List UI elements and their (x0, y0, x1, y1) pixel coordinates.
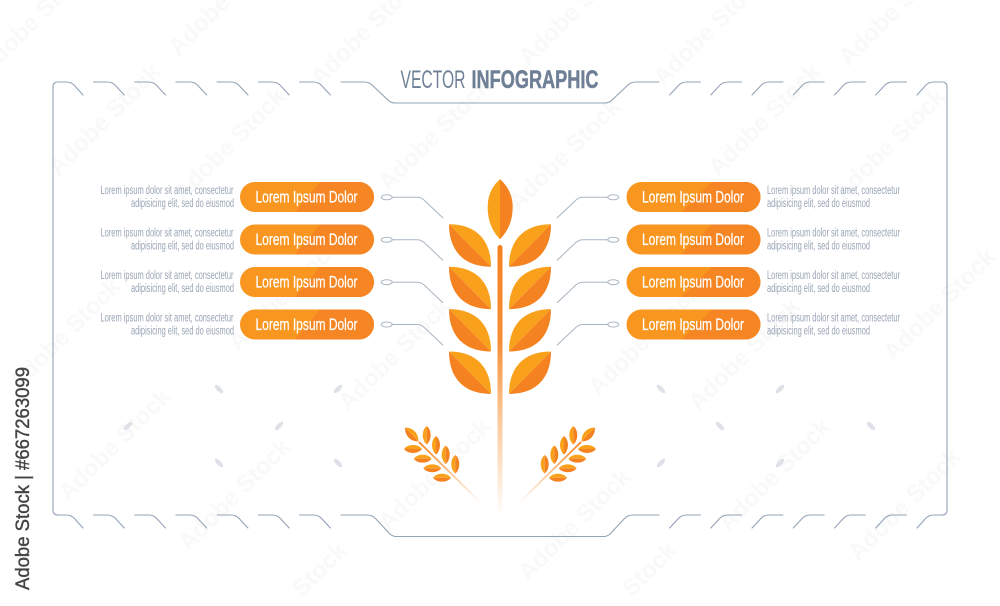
background watermark pattern: Adobe Stock (503, 93, 627, 216)
title: VECTOR (400, 66, 466, 94)
description text right: adipisicing elit, sed do eiusmod (767, 326, 870, 338)
description text right: Lorem ipsum dolor sit amet, consectetur (767, 185, 900, 197)
connectors left (381, 195, 443, 345)
label pills left: Lorem Ipsum Dolor (256, 315, 358, 334)
background watermark pattern: Adobe Stock (53, 383, 177, 506)
label pills left: Lorem Ipsum Dolor (256, 230, 358, 249)
background watermark pattern: Adobe Stock (683, 293, 807, 416)
wheat stem (498, 245, 502, 517)
label pills left: Lorem Ipsum Dolor (256, 273, 358, 292)
background watermark pattern: Adobe Stock (828, 83, 952, 206)
background watermark pattern: Adobe Stock (713, 413, 837, 536)
description text right (767, 185, 900, 338)
description text left: Lorem ipsum dolor sit amet, consectetur (100, 270, 234, 282)
background watermark pattern: Stock (617, 537, 683, 602)
background watermark pattern: Adobe Stock (223, 233, 347, 356)
background watermark pattern: Adobe Stock (373, 73, 497, 196)
description text left: Lorem ipsum dolor sit amet, consectetur (100, 228, 234, 240)
description text left: adipisicing elit, sed do eiusmod (131, 198, 234, 210)
description text right: adipisicing elit, sed do eiusmod (767, 198, 870, 210)
description text left (100, 185, 234, 338)
background watermark pattern: Adobe Stock (513, 463, 637, 586)
background watermark pattern: Adobe Stock (173, 433, 297, 556)
stock id label: Adobe Stock | #667263099 (13, 367, 34, 590)
decorative grey leaves (122, 383, 877, 469)
label pills right (626, 182, 760, 340)
description text right: adipisicing elit, sed do eiusmod (767, 240, 870, 252)
label pills right: Lorem Ipsum Dolor (642, 188, 744, 207)
connectors right (557, 195, 619, 345)
label pills right: Lorem Ipsum Dolor (642, 230, 744, 249)
title: INFOGRAPHIC (472, 66, 598, 94)
small wheat sprig right (520, 426, 596, 502)
label pills right: Lorem Ipsum Dolor (642, 273, 744, 292)
background watermark pattern: Adobe Stock (843, 443, 967, 566)
description text left: adipisicing elit, sed do eiusmod (131, 326, 234, 338)
title (400, 66, 598, 94)
background watermark pattern: Adobe Stock (43, 58, 167, 181)
background watermark pattern: Adobe Stock (583, 278, 707, 401)
description text left: Lorem ipsum dolor sit amet, consectetur (100, 185, 234, 197)
small wheat sprig left (404, 426, 480, 502)
description text right: Lorem ipsum dolor sit amet, consectetur (767, 312, 900, 324)
label pills left (240, 182, 374, 340)
background watermark pattern: Adobe Stock (333, 293, 457, 416)
background watermark pattern: Adobe Stock (373, 413, 497, 536)
wheat leaves: left column (449, 224, 491, 394)
description text right: adipisicing elit, sed do eiusmod (767, 283, 870, 295)
description text left: Lorem ipsum dolor sit amet, consectetur (100, 312, 234, 324)
description text left: adipisicing elit, sed do eiusmod (131, 240, 234, 252)
frame: dashed top and bottom border with side rails (53, 82, 947, 536)
wheat leaves: right column (509, 224, 551, 394)
wheat top leaf (488, 179, 513, 239)
description text right: Lorem ipsum dolor sit amet, consectetur (767, 228, 900, 240)
background watermark pattern: Adobe Stock (3, 273, 127, 396)
description text left: adipisicing elit, sed do eiusmod (131, 283, 234, 295)
label pills right: Lorem Ipsum Dolor (642, 315, 744, 334)
label pills left: Lorem Ipsum Dolor (256, 188, 358, 207)
description text right: Lorem ipsum dolor sit amet, consectetur (767, 270, 900, 282)
background watermark pattern: Stock (287, 537, 353, 602)
background watermark pattern: Adobe Stock (703, 58, 827, 181)
background watermark pattern: Adobe Stock (168, 83, 292, 206)
background watermark pattern: Adobe Stock (878, 243, 1000, 366)
